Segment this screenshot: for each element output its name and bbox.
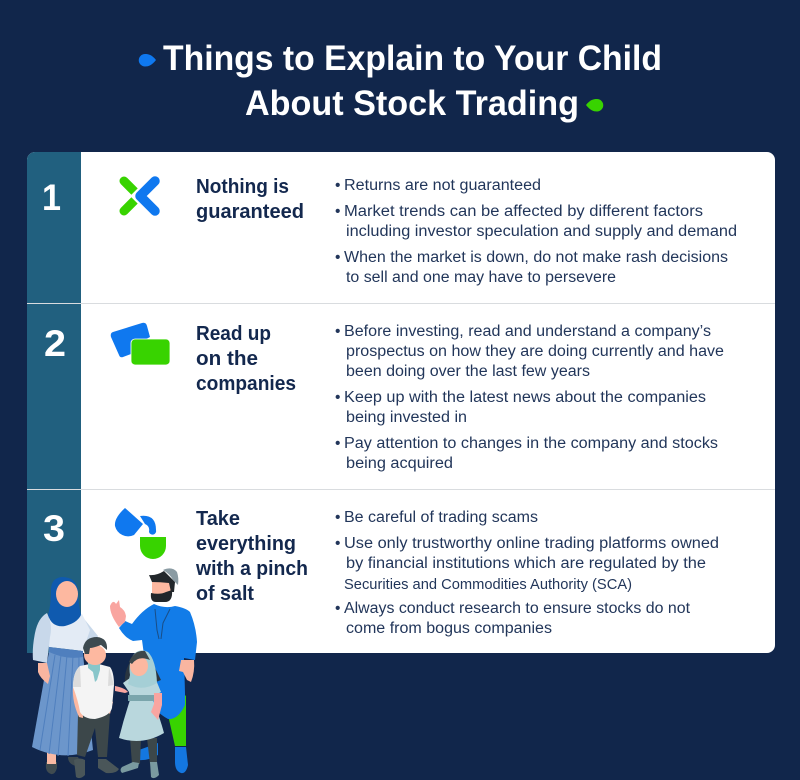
bullet list 1: • [335, 249, 340, 266]
bullet list 1: Market trends can be affected by different factors [344, 203, 703, 220]
bullet list 3: Securities and Commodities Authority (SCA) [344, 576, 632, 593]
man head [152, 578, 172, 594]
bullet list 2: being acquired [346, 455, 453, 472]
bullet list 1: • [335, 203, 340, 220]
figure: boy [73, 637, 128, 778]
bullet list 3: Be careful of trading scams [344, 509, 538, 526]
bullet list 2: prospectus on how they are doing currently and have [346, 343, 724, 360]
heading: read up on the companies [196, 323, 296, 395]
bullet list 3: Use only trustworthy online trading platforms owned [344, 535, 719, 552]
heading: read up on the companies: companies [196, 373, 296, 395]
icon: two cards [111, 323, 170, 365]
bullet list 2: • [335, 435, 340, 452]
panel: card [27, 152, 775, 653]
bullet list 3: • [335, 509, 340, 526]
bullet list 2: been doing over the last few years [346, 363, 590, 380]
title line 1: Things to Explain to Your Child [163, 39, 662, 78]
bullet list 3: • [335, 600, 340, 617]
illustration: family [32, 568, 197, 778]
number 1: 1 [42, 177, 61, 218]
bullet list 1: Returns are not guaranteed [344, 177, 541, 194]
title line 2: About Stock Trading [245, 84, 579, 123]
heading: read up on the companies: Read up [196, 323, 271, 345]
bullet list 1: including investor speculation and supply and demand [346, 223, 737, 240]
figure: man [110, 568, 197, 773]
number 2: 2 [44, 323, 66, 364]
heading: take everything with a pinch of salt: everything [196, 533, 296, 555]
bullet list 1: • [335, 177, 340, 194]
bullet list 2: • [335, 323, 340, 340]
heading: nothing is guaranteed [196, 176, 304, 223]
icon: cross arrows [124, 181, 155, 211]
icon: blue leaf bullet [139, 54, 156, 66]
figure: girl [119, 650, 164, 778]
bullet list 3: Always conduct research to ensure stocks do not [344, 600, 691, 617]
figure: woman [32, 577, 98, 774]
row 1 [42, 176, 737, 286]
row 3 [43, 508, 719, 637]
title [139, 39, 662, 123]
row 2 [44, 323, 724, 472]
heading: take everything with a pinch of salt [195, 508, 308, 605]
bullet list 2: being invested in [346, 409, 467, 426]
bullet list 3: by financial institutions which are regulated by the [346, 555, 706, 572]
heading: read up on the companies: on the [196, 348, 258, 370]
bullet list 2: Before investing, read and understand a company’s [344, 323, 711, 340]
bullet list 2: Keep up with the latest news about the companies [344, 389, 706, 406]
heading: take everything with a pinch of salt: of salt [196, 583, 254, 605]
icon: pouring drop into cup [115, 508, 166, 559]
number 3: 3 [43, 508, 65, 549]
bullet list 1 [335, 177, 737, 286]
bullet list 1: When the market is down, do not make rash decisions [344, 249, 728, 266]
heading: take everything with a pinch of salt: Take [196, 508, 240, 530]
bullet list 2: • [335, 389, 340, 406]
bullet list 2: Pay attention to changes in the company and stocks [344, 435, 718, 452]
bullet list 1: to sell and one may have to persevere [346, 269, 616, 286]
heading: take everything with a pinch of salt: with a pinch [195, 558, 308, 580]
bullet list 3: • [335, 535, 340, 552]
icon: green leaf bullet [586, 99, 603, 112]
bullet list 2 [335, 323, 724, 472]
bullet list 3: come from bogus companies [346, 620, 552, 637]
bullet list 3 [335, 509, 719, 637]
heading: nothing is guaranteed: guaranteed [196, 201, 304, 223]
heading: nothing is guaranteed: Nothing is [196, 176, 289, 198]
